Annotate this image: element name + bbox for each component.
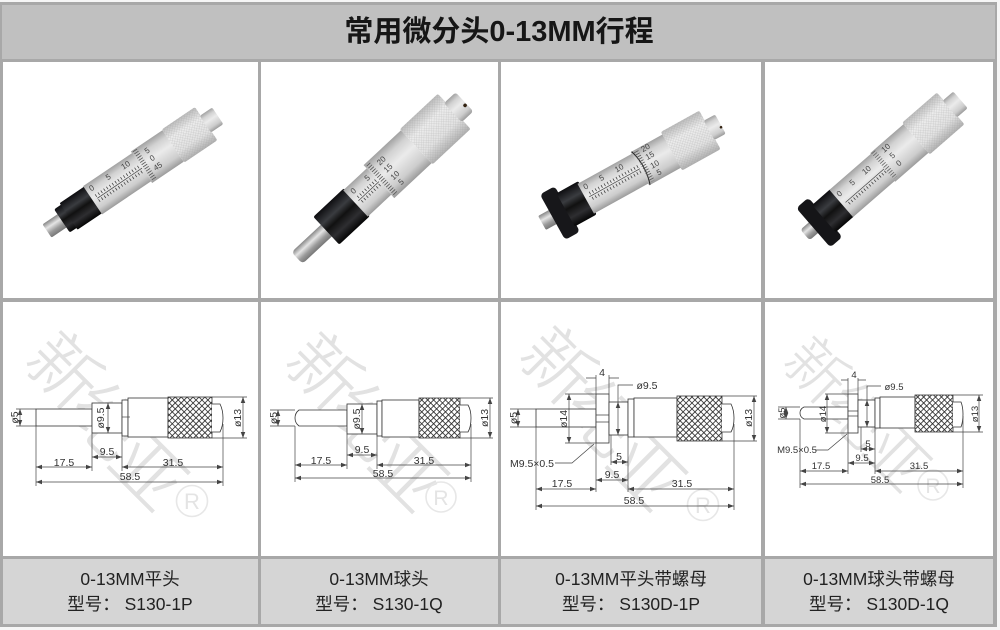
- technical drawing: ø5: [508, 412, 520, 424]
- technical drawing: ø13: [743, 409, 755, 427]
- technical drawing: 5: [616, 451, 622, 463]
- watermark: 纪: [51, 368, 159, 476]
- technical drawing: ø9.5: [95, 407, 107, 429]
- icon: micrometer flat head with nut: 15: [644, 149, 656, 162]
- caption: S130D-1P: [501, 559, 761, 624]
- technical drawing: 9.5: [855, 453, 869, 464]
- technical drawing: 4: [599, 367, 605, 379]
- watermark: 亚: [93, 419, 201, 527]
- icon: micrometer ball head with nut: [788, 80, 978, 255]
- technical drawing: 9.5: [605, 469, 619, 481]
- watermark: 纪: [547, 365, 655, 473]
- watermark: [9, 318, 207, 527]
- icon: micrometer ball head: 10: [389, 169, 402, 182]
- panel: drawing S130D-1Q: [765, 302, 993, 556]
- panel: drawing S130D-1P: [501, 302, 761, 556]
- watermark: R: [695, 493, 711, 518]
- technical drawing: [777, 370, 983, 488]
- icon: micrometer flat head: [36, 99, 229, 248]
- icon: micrometer ball head with nut: 10: [860, 164, 873, 177]
- technical drawing: [268, 398, 493, 482]
- icon: micrometer flat head: 0: [87, 183, 97, 193]
- watermark: 新: [269, 319, 377, 427]
- technical drawing: ø14: [558, 410, 570, 428]
- watermark: 新: [9, 318, 117, 426]
- watermark: [269, 319, 461, 528]
- icon: micrometer flat head with nut: 5: [598, 173, 606, 183]
- watermark: 新: [503, 313, 611, 421]
- technical drawing: 31.5: [163, 457, 183, 469]
- watermark: 亚: [591, 419, 699, 527]
- technical drawing: [508, 367, 757, 510]
- technical drawing: 58.5: [120, 471, 140, 483]
- watermark: 新: [769, 325, 862, 418]
- icon: micrometer flat head with nut: [529, 101, 733, 246]
- technical drawing: M9.5×0.5: [510, 458, 554, 470]
- technical drawing: ø5: [777, 407, 788, 419]
- technical drawing: 58.5: [624, 495, 644, 507]
- icon: micrometer flat head with nut: 5: [655, 167, 664, 177]
- technical drawing: 17.5: [311, 455, 331, 467]
- technical drawing: ø9.5: [351, 408, 363, 430]
- watermark: 纪: [311, 369, 419, 477]
- technical drawing: 58.5: [871, 475, 889, 486]
- icon: micrometer ball head: 5: [396, 177, 406, 187]
- panel: photo S130D-1Q: [765, 62, 993, 298]
- technical drawing: ø5: [268, 412, 280, 424]
- panel: drawing S130-1Q: [261, 302, 498, 556]
- icon: micrometer ball head: 20: [375, 154, 388, 167]
- technical drawing: ø9.5: [636, 380, 658, 392]
- caption: S130-1P: [3, 559, 258, 624]
- icon: micrometer ball head: 5: [363, 173, 372, 183]
- technical drawing: 31.5: [414, 455, 434, 467]
- caption: S130-1Q: [261, 559, 498, 624]
- icon: micrometer flat head with nut: 0: [582, 181, 590, 192]
- technical drawing: M9.5×0.5: [777, 445, 817, 456]
- icon: micrometer ball head with nut: 5: [888, 150, 897, 161]
- technical drawing: 31.5: [672, 478, 692, 490]
- watermark: R: [184, 489, 200, 514]
- technical drawing: [9, 397, 247, 486]
- icon: micrometer ball head with nut: 10: [880, 141, 893, 154]
- caption: S130-1Q: 0-13MM球头: [329, 569, 429, 589]
- caption: S130-1P: 型号： S130-1P: [67, 594, 193, 614]
- icon: micrometer ball head with nut: 0: [835, 189, 844, 199]
- technical drawing: ø13: [479, 409, 491, 427]
- icon: micrometer ball head with nut: 5: [848, 177, 857, 188]
- icon: micrometer flat head: 10: [119, 159, 132, 171]
- watermark: 亚: [353, 420, 461, 528]
- caption: S130D-1Q: [765, 559, 993, 624]
- icon: micrometer ball head: 0: [349, 186, 359, 196]
- technical drawing: 58.5: [373, 468, 393, 480]
- watermark: [769, 325, 948, 506]
- watermark: R: [433, 487, 449, 510]
- technical drawing: ø14: [818, 406, 829, 422]
- technical drawing: 17.5: [812, 461, 830, 472]
- caption: S130D-1Q: 型号： S130D-1Q: [809, 594, 949, 614]
- title band: 常用微分头0-13MM行程: [344, 15, 654, 48]
- icon: micrometer ball head with nut: 0: [894, 158, 904, 168]
- icon: micrometer flat head with nut: 20: [639, 142, 652, 154]
- title band: [2, 5, 995, 59]
- technical drawing: 9.5: [100, 446, 114, 458]
- icon: micrometer flat head with nut: 10: [649, 158, 661, 171]
- technical drawing: 5: [865, 439, 871, 450]
- icon: micrometer ball head: 15: [382, 161, 395, 174]
- technical drawing: 17.5: [552, 478, 572, 490]
- technical drawing: ø13: [970, 406, 981, 422]
- technical drawing: ø5: [9, 411, 21, 424]
- watermark: 纪: [809, 370, 902, 463]
- icon: micrometer flat head with nut: 10: [613, 162, 626, 174]
- technical drawing: 9.5: [355, 444, 369, 456]
- caption: S130D-1P: 型号： S130D-1P: [562, 594, 700, 614]
- panel: photo S130D-1P: [501, 62, 761, 298]
- technical drawing: ø13: [232, 409, 244, 427]
- watermark: [503, 313, 718, 527]
- caption: S130D-1P: 0-13MM平头带螺母: [555, 569, 707, 589]
- icon: micrometer flat head: 5: [143, 145, 152, 156]
- technical drawing: 4: [851, 370, 857, 381]
- technical drawing: 31.5: [910, 461, 928, 472]
- icon: micrometer flat head: 5: [104, 172, 113, 182]
- technical drawing: ø9.5: [884, 382, 904, 393]
- caption: S130D-1Q: 0-13MM球头带螺母: [803, 569, 955, 589]
- icon: micrometer flat head: 45: [152, 160, 165, 173]
- technical drawing: 17.5: [54, 457, 74, 469]
- panel: photo S130-1Q: [261, 62, 498, 298]
- panel: drawing S130-1P: [3, 302, 258, 556]
- icon: micrometer ball head: [281, 84, 481, 276]
- caption: S130-1Q: 型号： S130-1Q: [315, 594, 443, 614]
- caption: S130-1P: 0-13MM平头: [80, 569, 180, 589]
- watermark: 亚: [849, 413, 942, 506]
- icon: micrometer flat head: 0: [148, 153, 157, 163]
- panel: photo S130-1P: [3, 62, 258, 298]
- watermark: R: [925, 475, 941, 498]
